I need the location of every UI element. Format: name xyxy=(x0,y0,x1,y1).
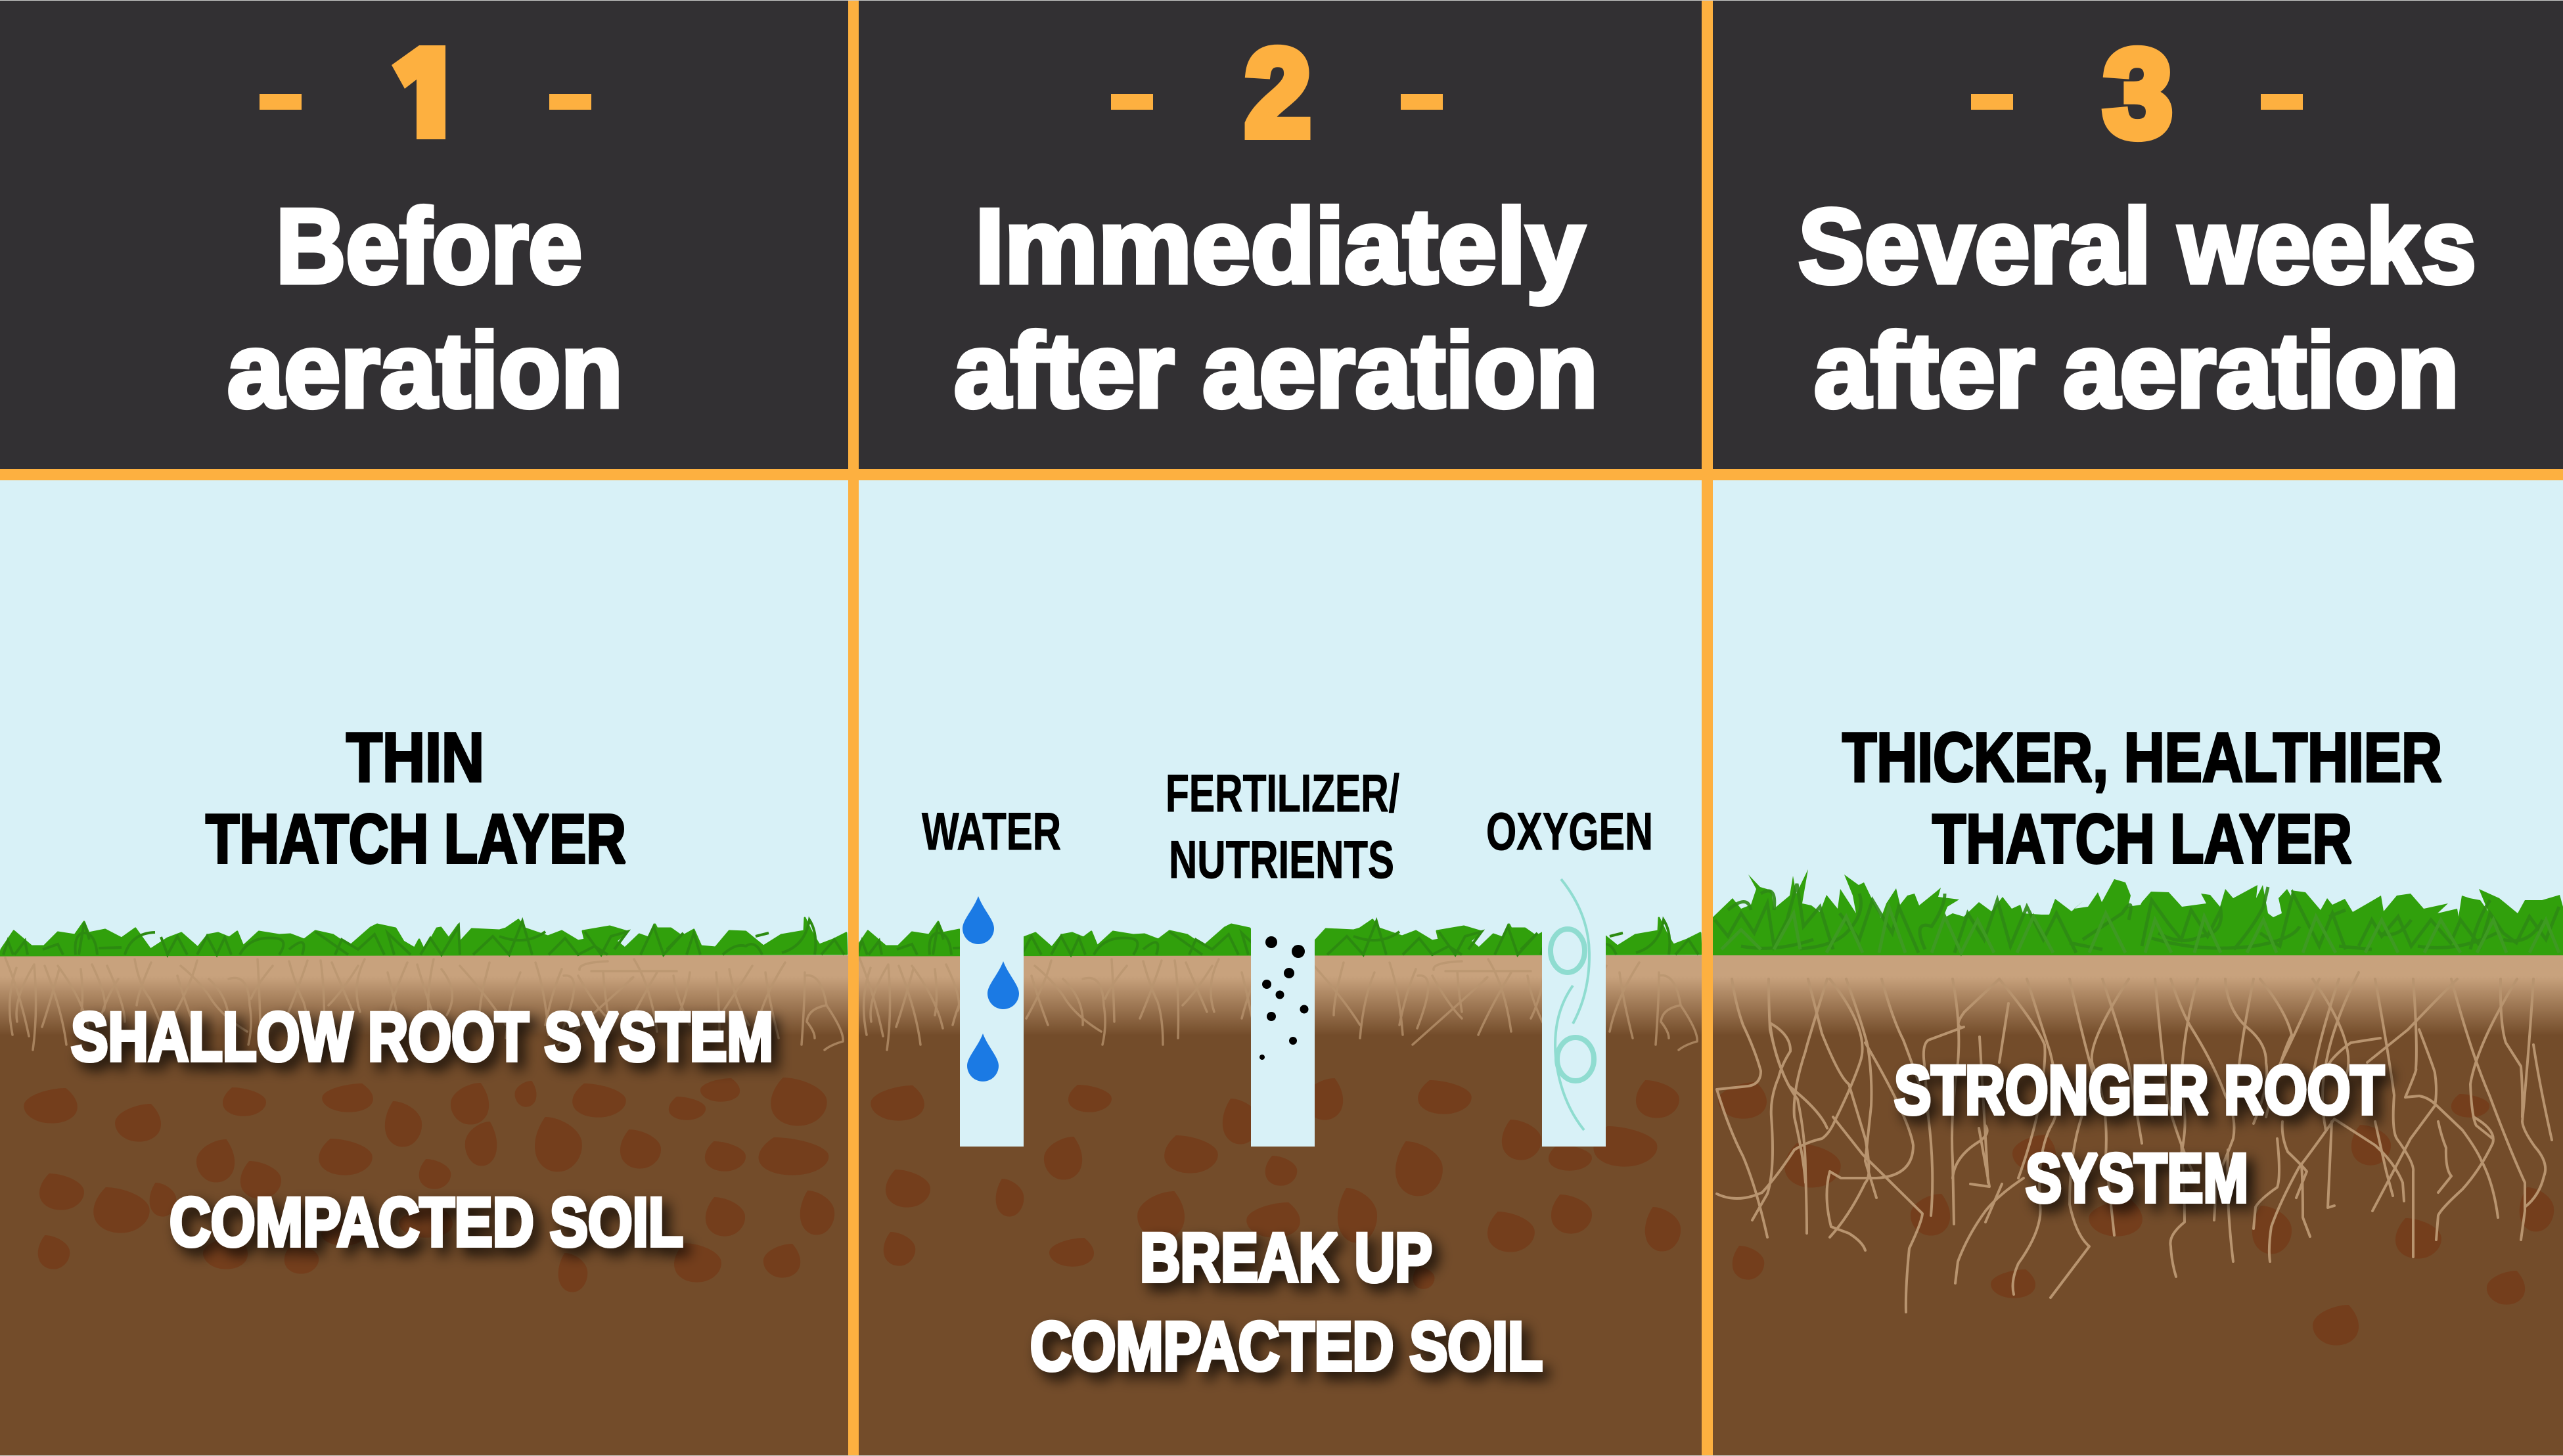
panel 3: several weeks after aeration xyxy=(1713,719,2563,1456)
aeration hole 3 xyxy=(1542,920,1606,1147)
aeration hole 1 xyxy=(960,920,1024,1147)
step number 1: 1 xyxy=(394,23,463,161)
label: shallow root system: SHALLOW ROOT SYSTEM xyxy=(71,999,773,1076)
step number 2 xyxy=(1111,24,1443,162)
label: stronger root system: STRONGER ROOT xyxy=(1894,1052,2384,1129)
label: thicker healthier thatch layer: THATCH LAYER xyxy=(1932,800,2352,878)
step number 3: 3 xyxy=(2104,24,2172,162)
heading: several weeks after aeration: after aeration xyxy=(1814,311,2459,430)
header 1 xyxy=(228,45,619,410)
label: thin thatch layer xyxy=(206,719,626,878)
label: thin thatch layer: THATCH LAYER xyxy=(206,800,626,878)
icon: oxygen swirls xyxy=(1551,879,1594,1130)
label: fertilizer / nutrients xyxy=(1166,764,1399,890)
shallow roots 1 xyxy=(5,958,843,1050)
label: oxygen: OXYGEN xyxy=(1486,802,1653,861)
thin grass 1 xyxy=(0,918,847,955)
heading: immediately after aeration: Immediately xyxy=(975,187,1585,306)
thin grass 2 xyxy=(854,918,1701,955)
soil cross-section 3 xyxy=(1713,955,2563,1456)
label: break up compacted soil xyxy=(1030,1219,1543,1385)
heading: several weeks after aeration: Several weeks xyxy=(1798,187,2476,306)
label: break up compacted soil: BREAK UP xyxy=(1140,1219,1432,1296)
icon: water drops xyxy=(963,896,1019,1081)
label: stronger root system xyxy=(1894,1052,2384,1217)
step number 2: 2 xyxy=(1245,24,1311,162)
roots 2 xyxy=(859,958,1697,1050)
header band xyxy=(0,0,2563,469)
label: water: WATER xyxy=(922,802,1061,861)
panel 1: before aeration xyxy=(0,719,848,1456)
heading: before aeration xyxy=(227,187,623,430)
label: fertilizer / nutrients: NUTRIENTS xyxy=(1169,830,1394,890)
soil cross-section 1 xyxy=(0,955,848,1456)
label: thicker healthier thatch layer xyxy=(1842,719,2442,878)
header 3 xyxy=(1798,24,2476,430)
aeration hole 2 xyxy=(1251,920,1315,1147)
heading: several weeks after aeration xyxy=(1798,187,2476,430)
label: thin thatch layer: THIN xyxy=(346,719,484,796)
heading: before aeration: Before xyxy=(276,187,582,306)
soil clods 3 xyxy=(1718,1082,2554,1346)
soil clods 2 xyxy=(871,1078,1681,1289)
step number 3 xyxy=(1971,24,2303,162)
sky background xyxy=(0,480,2563,960)
compacted soil clods 1 xyxy=(24,1078,834,1292)
icon: fertilizer particles xyxy=(1259,936,1309,1060)
heading: immediately after aeration: after aeration xyxy=(954,311,1598,430)
heading: before aeration: aeration xyxy=(227,311,623,430)
deep roots 3 xyxy=(1717,972,2552,1312)
heading: immediately after aeration xyxy=(954,187,1598,430)
label: break up compacted soil: COMPACTED SOIL xyxy=(1030,1308,1543,1385)
thick grass 3 xyxy=(1713,869,2563,955)
step number 1 xyxy=(260,45,591,139)
label: fertilizer / nutrients: FERTILIZER/ xyxy=(1166,764,1399,823)
label: compacted soil: COMPACTED SOIL xyxy=(170,1184,683,1261)
soil cross-section 2 xyxy=(854,955,1702,1456)
label: thicker healthier thatch layer: THICKER, HEALTHIER xyxy=(1842,719,2442,796)
label: stronger root system: SYSTEM xyxy=(2026,1140,2248,1217)
header 2 xyxy=(954,24,1598,430)
panel 2: immediately after aeration xyxy=(854,764,1702,1456)
